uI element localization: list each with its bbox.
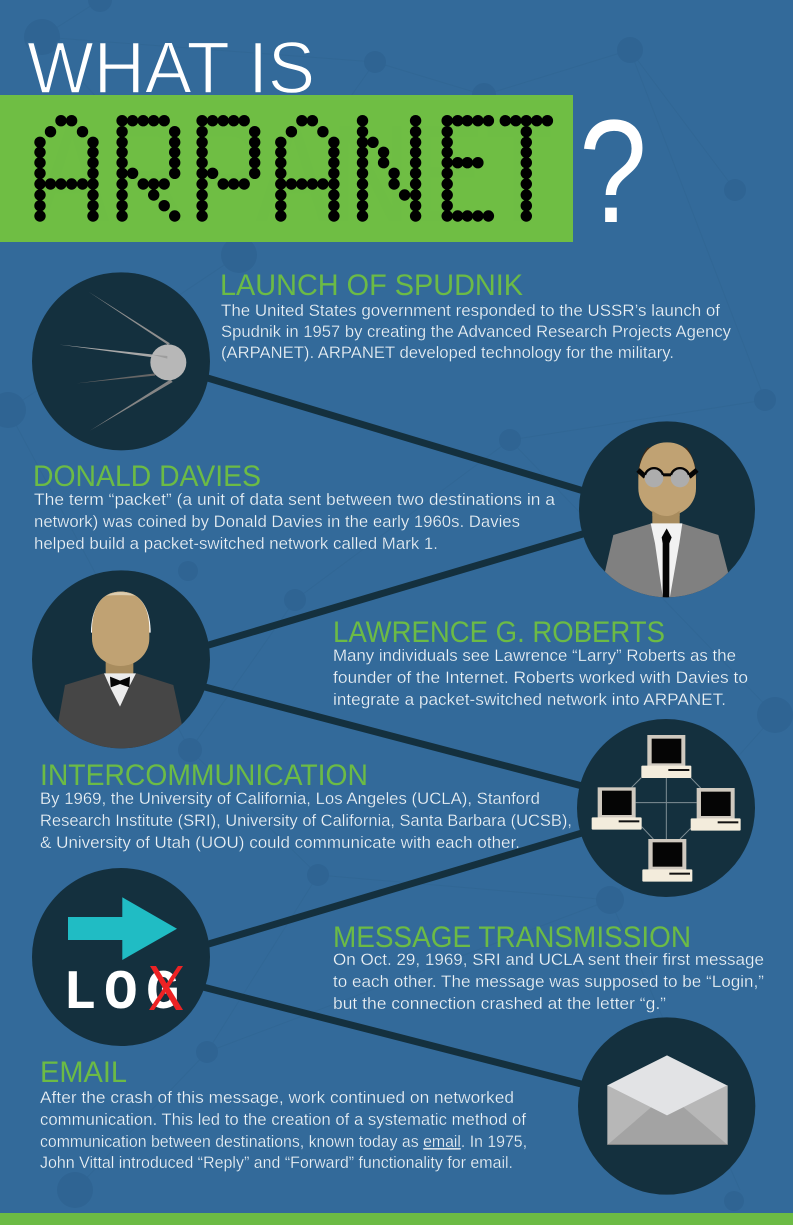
body text — [34, 491, 556, 553]
computer: right — [691, 788, 741, 831]
connector lines — [121, 352, 667, 1106]
section: launch of spudnik — [220, 269, 732, 362]
body text: Research Institute (SRI), University of California, Santa Barbara (UCSB), — [40, 812, 572, 830]
body text: Spudnik in 1957 by creating the Advanced Research Projects Agency — [221, 323, 732, 341]
LOG letters: LOG — [63, 961, 180, 1025]
section: email — [40, 1056, 527, 1172]
title: what is: WHAT IS — [27, 28, 315, 109]
computer: top — [641, 735, 691, 778]
body text — [221, 302, 732, 362]
body text: By 1969, the University of California, Los Angeles (UCLA), Stanford — [40, 790, 540, 808]
body text — [333, 647, 748, 709]
computer: left — [592, 787, 642, 830]
body text: integrate a packet-switched network into ARPANET. — [333, 691, 726, 709]
body text — [333, 951, 764, 1013]
icon: portrait of Donald Davies — [579, 421, 755, 610]
body text: & University of Utah (UOU) could communicate with each other. — [40, 834, 520, 852]
icon: portrait of Lawrence Roberts — [32, 570, 210, 760]
heading: EMAIL — [40, 1056, 127, 1089]
body text: founder of the Internet. Roberts worked with Davies to — [333, 669, 748, 687]
network links — [632, 778, 701, 839]
body text: After the crash of this message, work continued on networked — [40, 1089, 514, 1107]
heading: LAWRENCE G. ROBERTS — [333, 616, 665, 649]
icon: arrow and crashed LOG message — [32, 868, 210, 1046]
body text: network) was coined by Donald Davies in the early 1960s. Davies — [34, 513, 520, 531]
body text: On Oct. 29, 1969, SRI and UCLA sent their first message — [333, 951, 764, 969]
heading: INTERCOMMUNICATION — [40, 759, 368, 792]
body text — [40, 790, 572, 852]
body text: Many individuals see Lawrence “Larry” Roberts as the — [333, 647, 736, 665]
section: lawrence g. roberts — [333, 616, 748, 709]
body text: (ARPANET). ARPANET developed technology for the military. — [221, 344, 674, 362]
footer band — [0, 1213, 793, 1225]
computer: bottom — [642, 839, 692, 882]
body text: The term “packet” (a unit of data sent between two destinations in a — [34, 491, 556, 509]
icon: sputnik satellite — [32, 272, 210, 450]
heading: LAUNCH OF SPUDNIK — [220, 269, 523, 302]
heading: MESSAGE TRANSMISSION — [333, 921, 691, 954]
icon: four networked computers — [577, 719, 755, 897]
section: intercommunication — [40, 759, 572, 852]
title: question mark: ? — [579, 90, 647, 254]
body text: John Vittal introduced “Reply” and “Forward” functionality for email. — [40, 1154, 513, 1172]
body text: communication between destinations, known today as email. In 1975, — [40, 1133, 527, 1151]
body text: communication. This led to the creation of a systematic method of — [40, 1111, 526, 1129]
teal arrow — [68, 897, 177, 960]
body text: to each other. The message was supposed to be “Login,” — [333, 973, 764, 991]
icon: open envelope — [578, 1017, 755, 1195]
dot matrix lettering — [34, 115, 553, 222]
heading: DONALD DAVIES — [33, 460, 261, 493]
title banner: ARPANET — [0, 95, 573, 251]
body text: helped build a packet-switched network called Mark 1. — [34, 535, 438, 553]
title word in real text beneath the dots: ARPANET — [35, 97, 553, 251]
body text — [40, 1089, 527, 1172]
red cross — [149, 966, 183, 1010]
section: message transmission — [333, 921, 764, 1013]
body text: The United States government responded to the USSR’s launch of — [221, 302, 720, 320]
section: donald davies — [33, 460, 556, 553]
body text: but the connection crashed at the letter “g.” — [333, 995, 666, 1013]
